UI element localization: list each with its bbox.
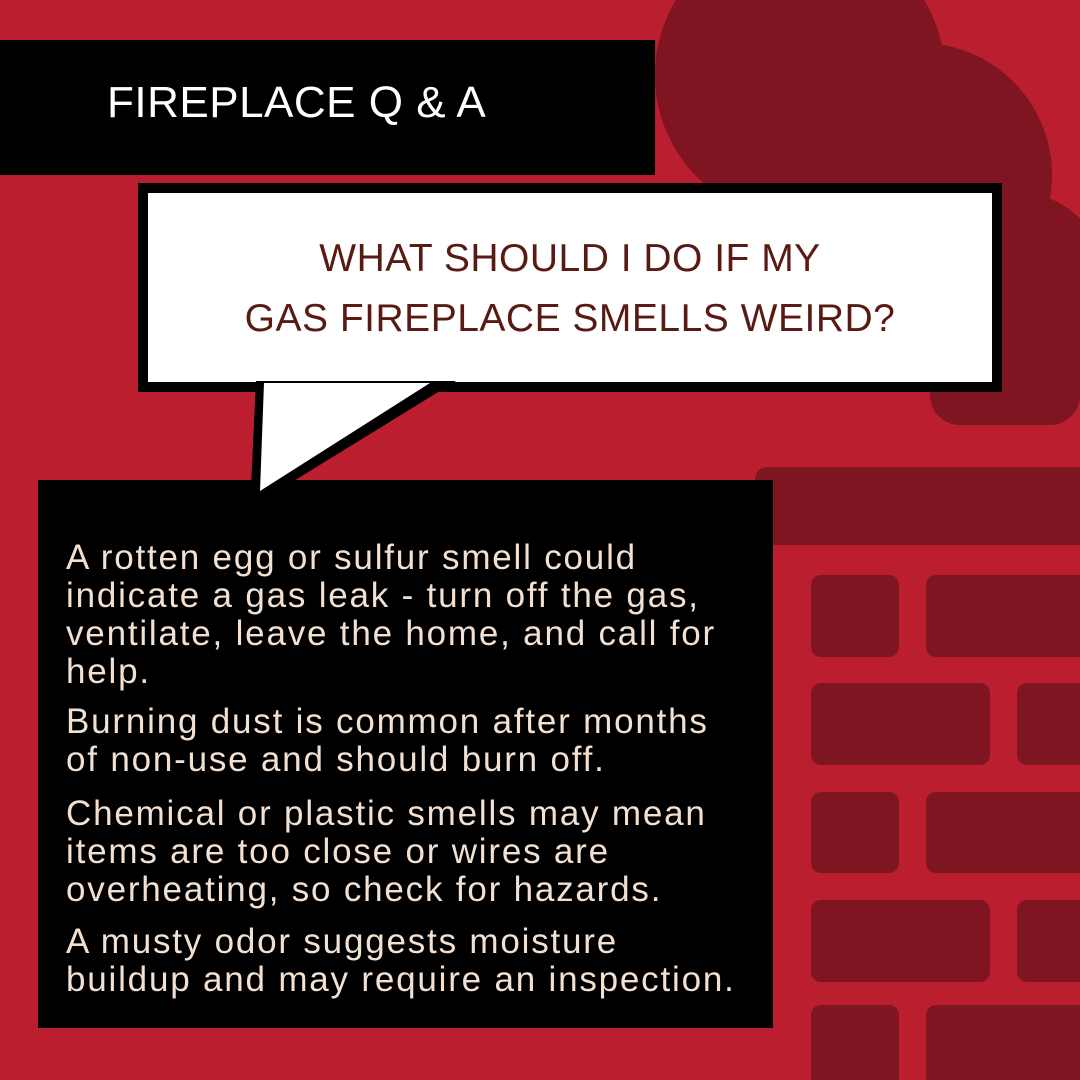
answer panel	[38, 480, 773, 1028]
answer text: buildup and may require an inspection.	[66, 960, 736, 999]
answer text: ventilate, leave the home, and call for	[66, 614, 716, 653]
answer text: A musty odor suggests moisture	[66, 922, 618, 961]
title: FIREPLACE Q & A	[107, 78, 486, 127]
question text: GAS FIREPLACE SMELLS WEIRD?	[245, 297, 895, 340]
answer text: Chemical or plastic smells may mean	[66, 794, 707, 833]
answer text: help.	[66, 652, 151, 691]
chimney cap	[755, 467, 1080, 545]
question text	[245, 237, 895, 340]
speech bubble: question	[138, 183, 1002, 491]
answer text: Burning dust is common after months	[66, 702, 709, 741]
answer text: of non-use and should burn off.	[66, 740, 606, 779]
answer text: overheating, so check for hazards.	[66, 870, 662, 909]
question text: WHAT SHOULD I DO IF MY	[319, 237, 821, 280]
answer text: items are too close or wires are	[66, 832, 610, 871]
chimney bricks	[811, 575, 1080, 1080]
answer text: indicate a gas leak - turn off the gas,	[66, 576, 700, 615]
title bar	[0, 40, 655, 175]
smoke cloud	[655, 0, 1080, 425]
answer text	[66, 538, 736, 999]
answer text: A rotten egg or sulfur smell could	[66, 538, 637, 577]
